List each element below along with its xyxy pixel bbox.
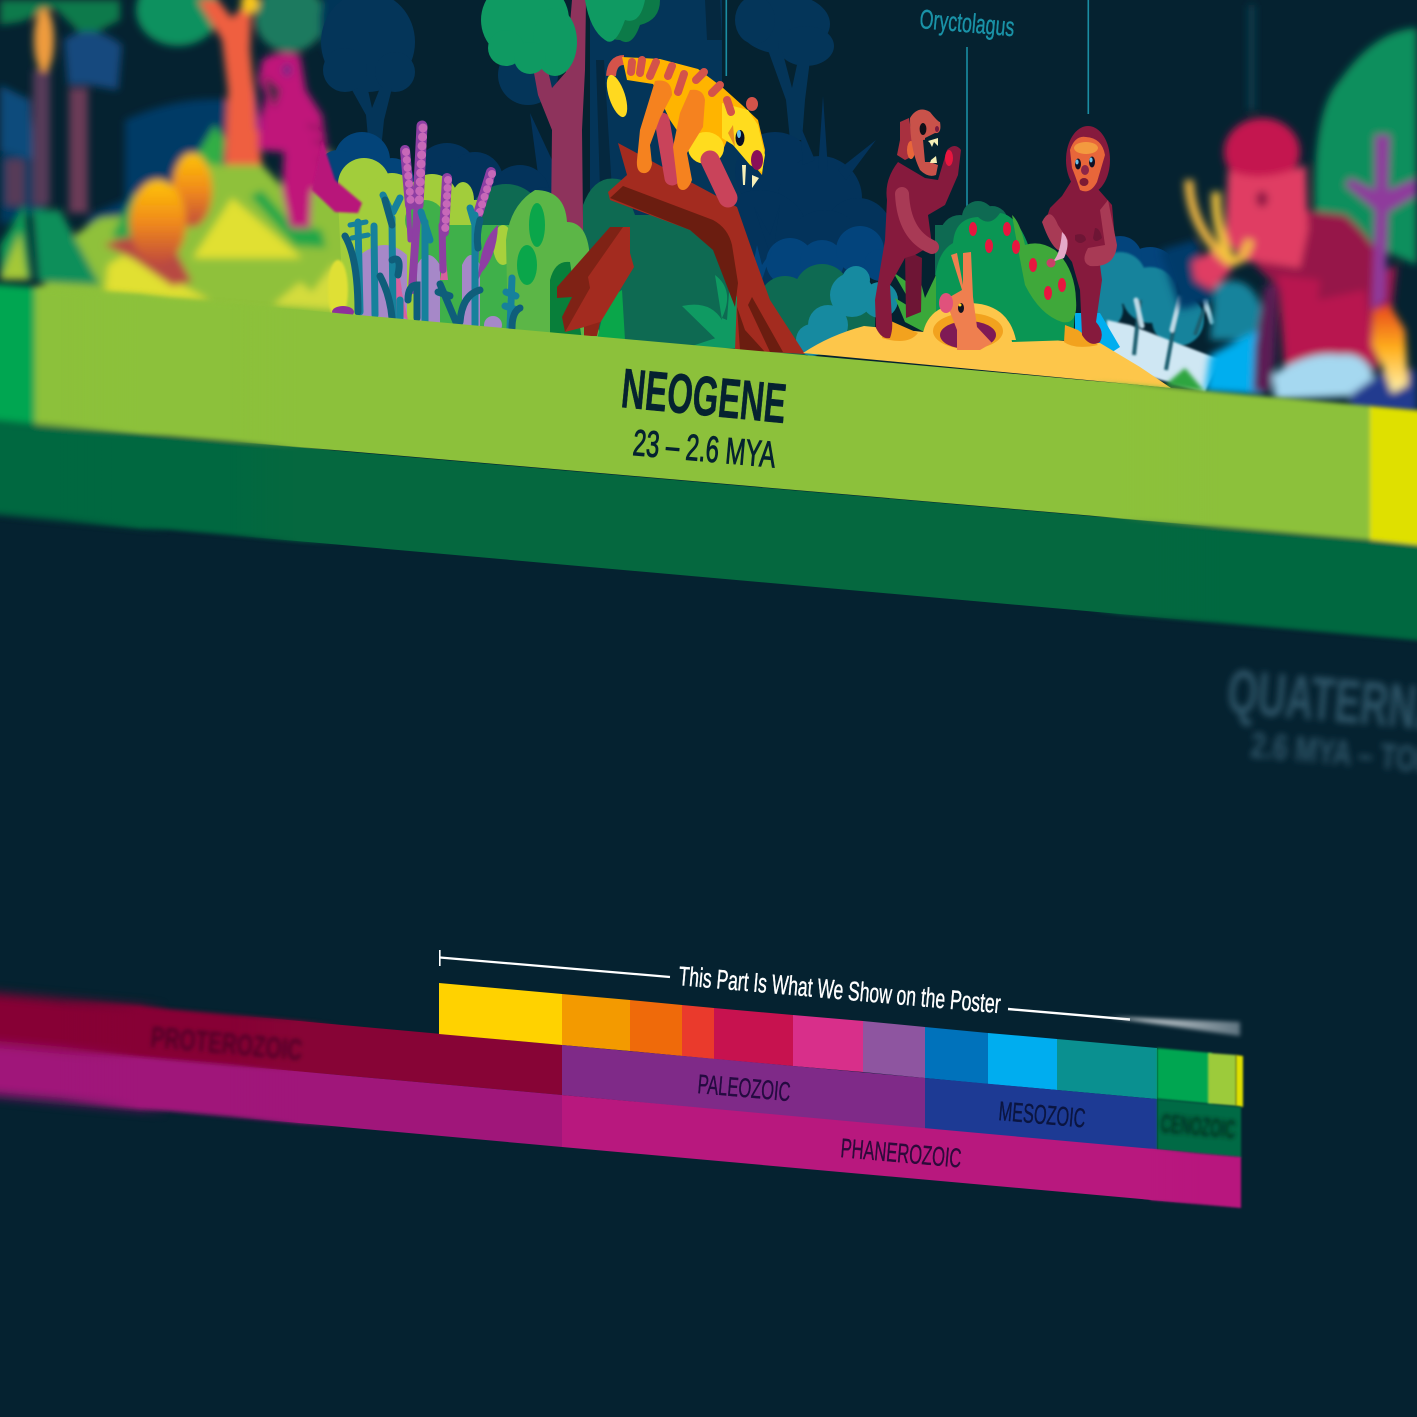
green foliage left of trunk [481, 0, 577, 76]
tiger [603, 57, 765, 198]
chest [688, 132, 724, 164]
stripes [631, 60, 731, 112]
left line [440, 958, 670, 977]
burrow [922, 303, 1016, 352]
berry bush [935, 213, 1076, 342]
monkey left [875, 110, 961, 341]
apple [945, 150, 953, 166]
pale plants [1134, 298, 1212, 370]
eye patch [728, 125, 735, 147]
green tree canopy [136, 0, 220, 46]
face [910, 110, 940, 176]
purple tree [1345, 135, 1417, 310]
timeline: phanerozoic strip [562, 1095, 1241, 1208]
head [722, 103, 765, 172]
vertical label line 3 [1088, 0, 1089, 114]
left tick [439, 950, 441, 966]
broken stump [557, 227, 634, 336]
band shapes slightly out of focus [0, 282, 1417, 643]
monkey right [1042, 126, 1117, 347]
forehead [1074, 142, 1098, 154]
teal reeds [350, 195, 517, 328]
eye [920, 123, 926, 135]
blue patch behind foliage [498, 45, 558, 105]
caption: This Part Is What We Show on the Poster [677, 961, 1002, 1019]
triassic [863, 1021, 925, 1078]
blue slope [1205, 330, 1262, 395]
palm trees [0, 0, 122, 213]
lime bush [338, 158, 480, 320]
lime ground [35, 150, 350, 330]
paleozoic label: PALEOZOIC [696, 1069, 792, 1107]
band dates: 23 – 2.6 MYA [631, 422, 778, 475]
mesozoic label: MESOZOIC [997, 1096, 1087, 1134]
dark green fan plant [0, 205, 100, 285]
rear leg back [662, 120, 672, 178]
big green tree [1315, 28, 1417, 265]
magenta dinosaur [254, 52, 340, 228]
green sprout [190, 125, 225, 165]
nostril [935, 126, 939, 132]
proterozoic label: PROTEROZOIC [149, 1021, 304, 1067]
purple flower spikes [405, 126, 492, 290]
sand hill [803, 326, 1171, 388]
precambrian soft focus [74, 1001, 334, 1128]
right line [1008, 1009, 1130, 1020]
yellow-green bud [493, 225, 513, 265]
permian [793, 1015, 863, 1072]
mammoth eye [1256, 191, 1268, 207]
purple leaf [478, 225, 498, 280]
navy bushes behind flowers [415, 143, 563, 225]
right arm [1084, 200, 1117, 266]
dark green hill left of log [583, 178, 770, 352]
rabbit [939, 252, 992, 350]
flame [1372, 305, 1408, 393]
eyes [1075, 158, 1081, 170]
mammoth leg [1278, 275, 1375, 380]
pink pads [388, 250, 448, 320]
blue scalloped bushes [766, 226, 1178, 303]
front leg red [710, 160, 728, 198]
timeline bracket [439, 950, 1240, 1036]
dark blue backdrop behind tiger [590, 0, 760, 340]
fangs [742, 165, 759, 188]
teeth [928, 138, 938, 163]
light arm [902, 194, 932, 247]
nose [751, 150, 763, 170]
lilac pads [360, 245, 502, 334]
log root stripes [737, 297, 783, 352]
teal bush [796, 266, 898, 356]
small green mound [1165, 368, 1205, 392]
vertical label line 1 [726, 0, 727, 76]
bright blue water [1075, 313, 1120, 360]
mouth [1080, 178, 1088, 186]
orange stegosaur [104, 153, 212, 286]
fern by the log [680, 270, 738, 350]
chest [1075, 228, 1102, 243]
dark teal canopy [255, 0, 325, 52]
vertical label line 2 [966, 47, 968, 237]
green hump behind stegosaur [112, 192, 150, 250]
face [1070, 137, 1105, 191]
cretaceous [988, 1033, 1057, 1090]
label: Oryctolagus: Oryctolagus [918, 4, 1016, 42]
left arm [1042, 214, 1068, 250]
dinosaur tail tip [312, 140, 362, 213]
paleogene green [1157, 1048, 1212, 1104]
rear leg [637, 81, 672, 173]
front leg [673, 90, 705, 190]
body [875, 146, 961, 338]
hair [897, 118, 915, 160]
maroon tree [532, 0, 586, 310]
vertical label line 4 [1248, 5, 1255, 110]
mesozoic [925, 1078, 1157, 1150]
mammoth tusks [1189, 180, 1250, 261]
mouth [923, 138, 938, 162]
log [608, 143, 805, 354]
head [1066, 126, 1110, 194]
silurian [630, 1000, 682, 1056]
dark green hill right of log [745, 264, 875, 355]
yellow hill [193, 198, 302, 258]
band shapes in focus [238, 308, 1210, 620]
light green bush [506, 190, 600, 340]
dark blue bushes [1160, 240, 1215, 310]
right blurred jungle [1160, 5, 1417, 415]
cenozoic label: CENOZOIC [1159, 1108, 1237, 1145]
blue leaves left of trunk [530, 113, 555, 215]
cenozoic [1157, 1099, 1241, 1158]
back leg [905, 250, 922, 318]
dark blue bush right [710, 96, 892, 290]
band shapes far out of focus [0, 280, 160, 532]
timeline: periods strip [439, 983, 1243, 1107]
pale rocks [1272, 354, 1378, 400]
teal mound [1210, 281, 1262, 340]
ordovician [562, 994, 630, 1051]
yellow bud left [328, 260, 348, 320]
grass tuft [893, 272, 936, 332]
pale water [1107, 320, 1221, 392]
blue bushes behind flowers [318, 132, 414, 202]
eye [736, 130, 744, 146]
precambrian far out of focus [0, 986, 164, 1117]
purple mound [332, 306, 354, 318]
teal bush right [1087, 252, 1204, 346]
green foliage right of trunk [585, 0, 660, 42]
dark green bush behind berries [935, 201, 1008, 275]
body [1044, 180, 1115, 344]
timeline: eras strip [562, 1045, 1241, 1158]
mammoth body [1255, 210, 1397, 380]
silhouette tree right [735, 0, 834, 140]
quaternary mini [1236, 1055, 1243, 1107]
neogene band [0, 282, 1417, 643]
dark teal reeds [345, 200, 520, 328]
green ridge [250, 190, 326, 248]
band title: NEOGENE [619, 356, 789, 435]
mammoth dome [1224, 118, 1300, 186]
berries [969, 222, 1066, 300]
phanerozoic bar right end [1150, 1149, 1241, 1208]
tail [611, 60, 624, 76]
green bush [405, 200, 522, 330]
phanerozoic bar [562, 1095, 1194, 1204]
jurassic [925, 1027, 988, 1084]
ear [746, 97, 758, 111]
mammoth [1189, 118, 1397, 392]
phanerozoic label: PHANEROZOIC [839, 1133, 963, 1174]
nose [1081, 165, 1089, 175]
yellow hill lower [105, 255, 210, 300]
devonian [682, 1005, 714, 1059]
light green patch [1012, 215, 1076, 322]
mammoth trunk [1192, 240, 1232, 290]
pale dunes [273, 262, 350, 310]
foot [1064, 325, 1098, 347]
mammoth face [1225, 165, 1308, 268]
paleozoic [562, 1045, 925, 1129]
claw sickle [1052, 232, 1068, 262]
right line blurred wedge [1110, 1017, 1240, 1036]
foot [882, 318, 918, 341]
ear [907, 141, 915, 159]
cambrian [439, 983, 562, 1045]
precambrian in focus [239, 1016, 562, 1147]
central jungle backdrop [312, 0, 1221, 392]
leaves behind bush [752, 245, 772, 280]
orange tree [198, 0, 262, 165]
log shadow [610, 186, 738, 307]
paleogene blue-green [1057, 1039, 1157, 1099]
far-left blurred jungle [0, 0, 360, 330]
green behind stump [550, 262, 625, 340]
mammoth back leg [1253, 285, 1278, 392]
timeline: precambrian columns [0, 991, 562, 1147]
silhouette tree left [321, 0, 415, 160]
neogene mini [1208, 1053, 1236, 1106]
body [622, 57, 765, 175]
dark rocks [1350, 370, 1417, 415]
carboniferous [714, 1008, 793, 1066]
